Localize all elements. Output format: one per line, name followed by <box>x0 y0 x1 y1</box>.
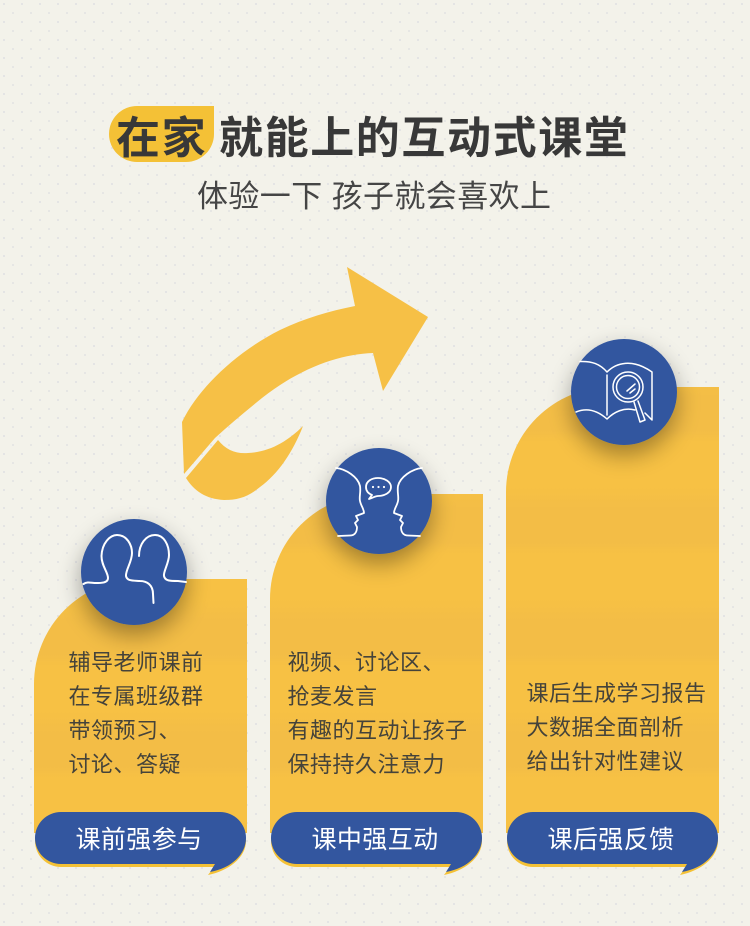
text block <box>68 650 204 777</box>
column <box>270 494 483 833</box>
title <box>109 106 629 163</box>
text block <box>288 650 468 777</box>
text block: 带领预习、 <box>68 718 181 743</box>
title highlight <box>109 106 214 162</box>
icon: two heads talking <box>326 448 432 554</box>
banner <box>35 812 246 875</box>
banner: 课后强反馈 <box>548 826 675 854</box>
panel: before class <box>34 519 247 875</box>
column <box>506 387 719 833</box>
banner <box>271 812 482 875</box>
panel: after class <box>506 339 719 875</box>
text block <box>526 681 707 774</box>
text block: 给出针对性建议 <box>526 749 684 774</box>
text block: 在专属班级群 <box>68 684 204 709</box>
banner: 课前强参与 <box>76 826 203 854</box>
text block: 抢麦发言 <box>288 684 378 709</box>
panel: during class <box>270 448 483 875</box>
column <box>34 579 247 833</box>
text block: 视频、讨论区、 <box>288 650 445 675</box>
title text: 在家 <box>116 114 207 163</box>
icon: book and magnifier <box>571 339 677 445</box>
text block: 大数据全面剖析 <box>526 715 684 740</box>
icon: two people <box>81 519 187 625</box>
arrow body and head <box>182 267 428 474</box>
banner: 课中强互动 <box>312 826 439 854</box>
arrow <box>182 267 428 500</box>
title: 就能上的互动式课堂 <box>219 114 629 163</box>
text block: 辅导老师课前 <box>68 650 204 675</box>
text block: 讨论、答疑 <box>68 752 181 777</box>
text block: 保持持久注意力 <box>288 752 445 777</box>
text block: 有趣的互动让孩子 <box>288 718 468 743</box>
banner <box>507 812 718 875</box>
text block: 课后生成学习报告 <box>526 681 707 706</box>
arrow tail <box>186 426 303 500</box>
subtitle: 体验一下 孩子就会喜欢上 <box>197 179 551 214</box>
